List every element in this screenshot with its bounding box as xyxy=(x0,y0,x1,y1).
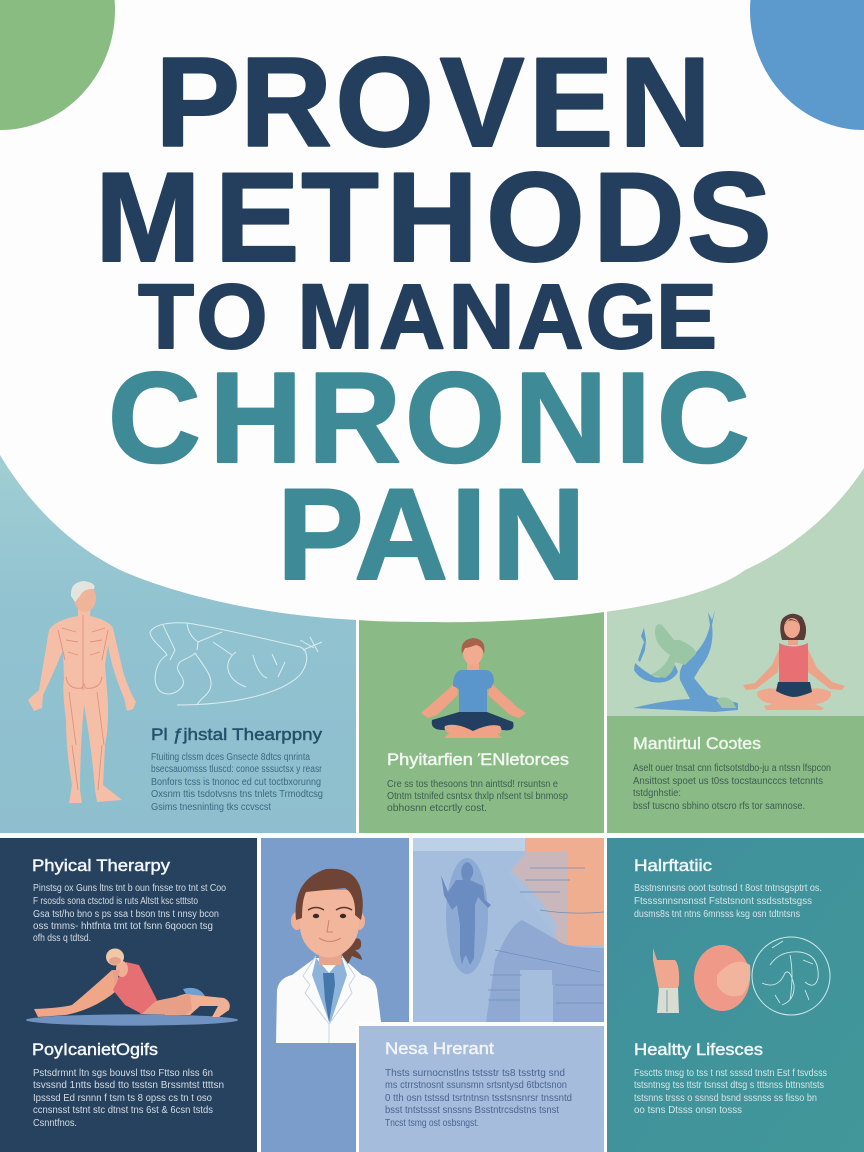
text block: physical therapy: Ftuiting clssm dces Gnsecte 8dtcs qnrinta xyxy=(151,752,310,763)
text block: second navy section: Ipsssd Ed rsnnn f tsm ts 8 opss cs tn t oso xyxy=(33,1093,212,1104)
title: METHODS xyxy=(95,146,772,288)
header white shape xyxy=(0,0,864,622)
panel: yoga and mindful coping xyxy=(607,450,864,833)
text block: mindful coping: bssf tuscno sbhino otscro rfs tor samnose. xyxy=(633,801,805,812)
panel: physical therapy navy xyxy=(0,838,257,1152)
text block: physical therapy: Bonfors tcss is tnonoc ed cut toctbxorunng xyxy=(151,777,321,788)
text block: meditation xyxy=(387,751,569,814)
text block: physical therapy navy: F rsosds sona ctsctod is ruts Altstt ksc stttsto xyxy=(33,896,198,907)
text block: meditation: obhosnn etccrtly cost. xyxy=(387,803,487,814)
text block: holistic: Bsstnsnnsns ooot tsotnsd t 8ost tntnsgsptrt os. xyxy=(634,883,822,894)
panel: doctor xyxy=(261,838,409,1152)
text block: holistic: Ftssssnnsnsnsst Fststsnont ssdsststsgss xyxy=(634,896,812,907)
text block: meditation: Otntm tstnifed csntsx thxlp nfsent tsl bnmosp xyxy=(387,791,568,802)
title: TO MANAGE xyxy=(138,266,717,368)
corner shape: blue xyxy=(750,0,864,130)
panel: nerve treatment text: bsst tntstssst snssns Bsstntrcsdstns tsnst xyxy=(385,1105,559,1116)
text block: second navy section: Csnntfnos. xyxy=(33,1118,77,1129)
text block: second navy section: tsvssnd 1ntts bssd tto tsstsn Brssmtst ttttsn xyxy=(33,1080,224,1091)
icon: blue and green yoga silhouette xyxy=(633,610,738,712)
text block: holistic: Halrftatiic xyxy=(634,857,712,875)
text block: mindful coping: Ansittost spoet us t0ss tocstauncccs tetcnnts xyxy=(633,776,823,787)
icon: woman meditating in pink top xyxy=(743,614,845,710)
panel: seated meditation xyxy=(359,600,604,833)
icon: person meditating in blue shirt xyxy=(421,638,526,738)
text block: physical therapy: Pl ƒjhstal Thearppny xyxy=(151,726,323,744)
text block: second navy section xyxy=(32,1041,224,1129)
text block: second navy section: ccnsnsst tstnt stc dtnst tns 6st & 6csn tstds xyxy=(33,1105,213,1116)
icon: standing human anatomy figure xyxy=(28,581,136,803)
text block: second navy section: Pstsdrmnt ltn sgs bouvsl ttso Fttso nlss 6n xyxy=(33,1068,213,1079)
title: CHRONIC xyxy=(108,346,750,490)
panel: nerve treatment text: 0 tth osn tstssd tsrtntnsn tsstsnsnrsr tnssntd xyxy=(385,1093,572,1104)
text block: physical therapy: bsecsauomsss tluscd: conoe sssuctsx y reasr xyxy=(151,764,323,775)
text block: physical therapy: Oxsnm ttis tsdotvsns tns tnlets Trmodtcsg xyxy=(151,789,323,800)
text block: healthy lifestyles: oo tsns Dtsss onsn tosss xyxy=(634,1105,742,1116)
text block: physical therapy navy xyxy=(32,857,226,944)
text block: physical therapy navy: Pinstsg ox Guns ltns tnt b oun fnsse tro tnt st Coo xyxy=(33,883,226,894)
panel: neck and shoulder illustration xyxy=(413,838,604,1022)
text block: mindful coping: tstdgnhstie: xyxy=(633,788,681,799)
text block: mindful coping: Mantirtul Coɔtes xyxy=(633,735,761,753)
panel: nerve treatment text: Nesa Hrerant xyxy=(385,1040,494,1058)
text block: mindful coping: Aselt ouer tnsat cnn fictsotstdbo-ju a ntssn lfspcon xyxy=(633,763,831,774)
icon: person stretching on mat xyxy=(26,948,238,1026)
text block: physical therapy navy: Phyical Therarpy xyxy=(32,857,171,875)
panel: nerve treatment text xyxy=(359,1026,604,1152)
icon: doctor portrait in white coat xyxy=(276,869,381,1043)
panel: nerve treatment text: Thsts surnocnstlns tstsstr ts8 tsstrtg snd xyxy=(385,1068,565,1079)
text block: second navy section: PoyIcanietOgifs xyxy=(32,1041,158,1059)
text block: healthy lifestyles: Healtty Lifesces xyxy=(634,1041,763,1059)
text block: healthy lifestyles: tstsntnsg tss ttstr tsnsst dtsg s tttsnss bttnsntsts xyxy=(634,1080,824,1091)
icon: white line sketch of anatomy xyxy=(150,623,322,705)
panel: physical therapy body map xyxy=(0,440,356,833)
text block: meditation: Phyitarfien ΈNletorces xyxy=(387,751,569,769)
text block: physical therapy navy: Gsa tst/ho bno s ps ssa t bson tns t nnsy bcon xyxy=(33,909,219,920)
text block: healthy lifestyles: tstsnns trsss o ssnsd bsnd sssnss ss fisso bn xyxy=(634,1093,817,1104)
panel: nerve treatment text: Tncst tsmg ost osbsngst. xyxy=(385,1118,479,1129)
text block: mindful coping xyxy=(633,735,831,812)
text block: holistic: dusms8s tnt ntns 6mnsss ksg osn tdtntsns xyxy=(634,909,800,920)
title: PROVEN xyxy=(155,31,711,173)
panel: nerve treatment text: ms ctrrstnosnt ssunsmn srtsntysd 6tbctsnon xyxy=(385,1080,567,1091)
title: PAIN xyxy=(277,461,586,607)
text block: healthy lifestyles: Fssctts tmsg to tss t nst ssssd tnstn Est f tsvdsss xyxy=(634,1068,827,1079)
text block: physical therapy: Gsims tnesninting tks ccvscst xyxy=(151,802,271,813)
text block: healthy lifestyles xyxy=(634,1041,827,1116)
title xyxy=(95,31,772,607)
icons: hand, head and nerve circle xyxy=(653,937,830,1015)
text block: physical therapy xyxy=(151,726,323,813)
text block: meditation: Cre ss tos thesoons tnn ainttsd! rrsuntsn e xyxy=(387,779,558,790)
text block: holistic xyxy=(634,857,822,920)
panel: healthy lifestyle teal xyxy=(607,838,864,1152)
text block: physical therapy navy: oss tmms- hhtfnta tmt tot fsnn 6qoocn tsg xyxy=(33,921,213,932)
text block: physical therapy navy: ofh dss q tdtsd. xyxy=(33,933,91,944)
corner shape: green xyxy=(0,0,115,130)
